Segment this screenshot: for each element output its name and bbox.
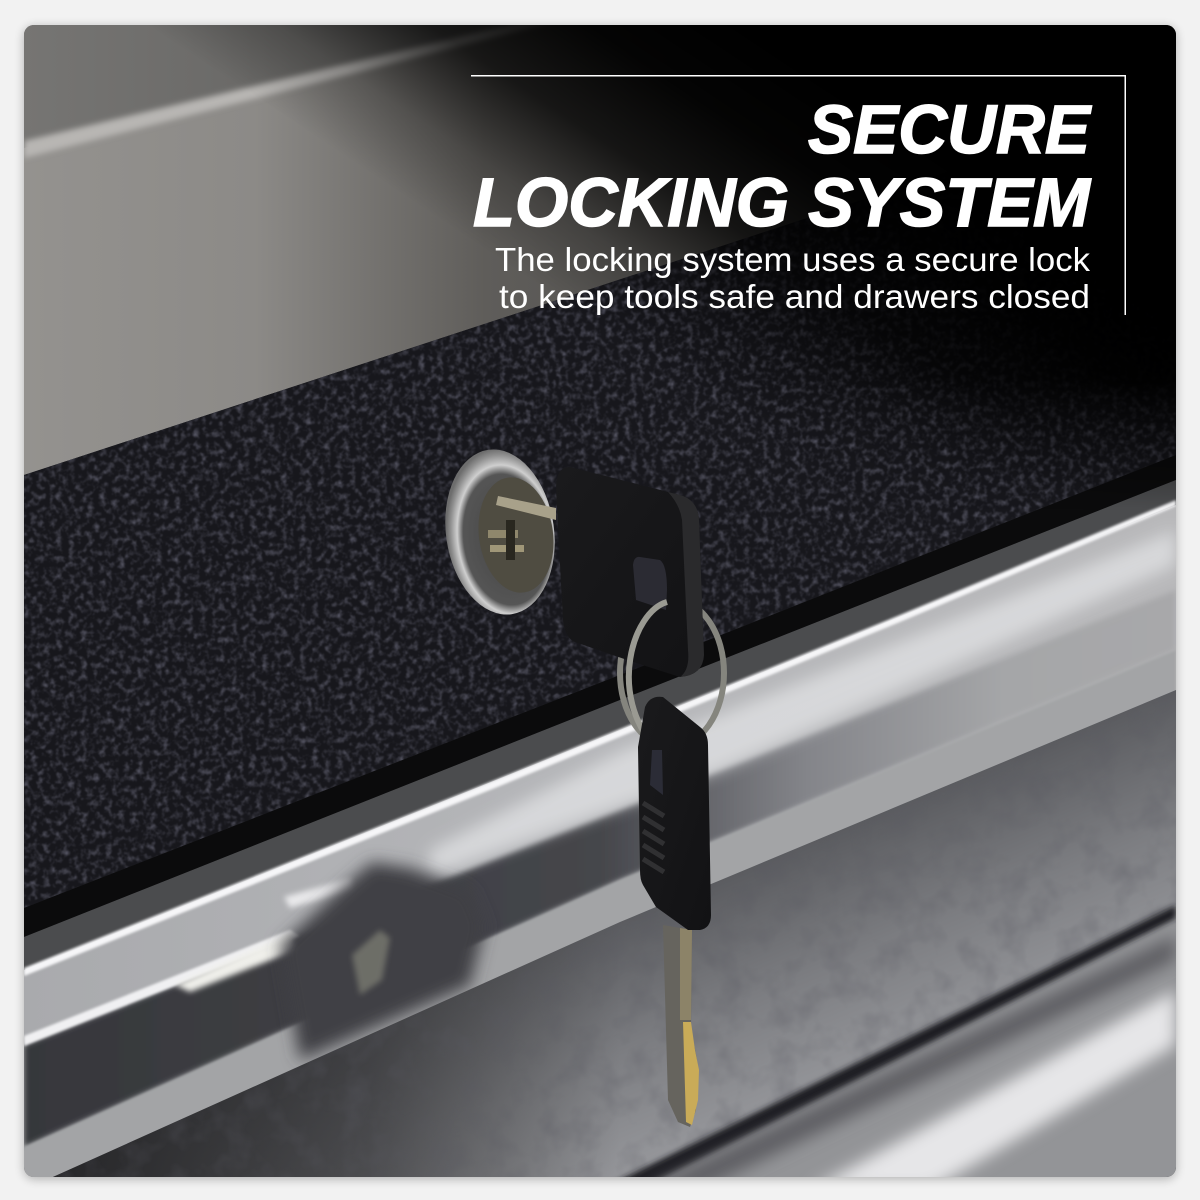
title: LOCKING SYSTEM: [473, 164, 1091, 241]
lower textured drawer: [24, 690, 1176, 1190]
textured black drawer front: [24, 242, 1176, 908]
second key head: [638, 697, 711, 930]
key ring back: [620, 599, 724, 747]
lower light band: [24, 650, 1176, 1195]
key ring front: [629, 602, 667, 747]
icon: lock cylinder: [435, 442, 565, 622]
subtitle text: The locking system uses a secure lock: [495, 241, 1091, 278]
subtitle text: [495, 241, 1091, 315]
key head: [556, 467, 704, 677]
title: SECURE: [808, 91, 1092, 168]
second key blade: [663, 925, 699, 1127]
icon: key with ring: [556, 467, 724, 1127]
dark reflection: [280, 862, 485, 1060]
black gap: [24, 455, 1176, 937]
lip: [24, 480, 1176, 970]
text frame lines: [471, 75, 1126, 315]
dark zone: [24, 590, 1176, 1147]
stainless top panel: [24, 20, 1176, 475]
subtitle text: to keep tools safe and drawers closed: [499, 278, 1090, 315]
lower chrome rail: [600, 905, 1176, 1190]
white highlights: [24, 500, 1176, 976]
dark corner gradient: [186, 25, 1176, 504]
bright zone: [24, 505, 1176, 1185]
chrome handle rail: [24, 455, 1176, 1195]
title: [473, 91, 1092, 241]
